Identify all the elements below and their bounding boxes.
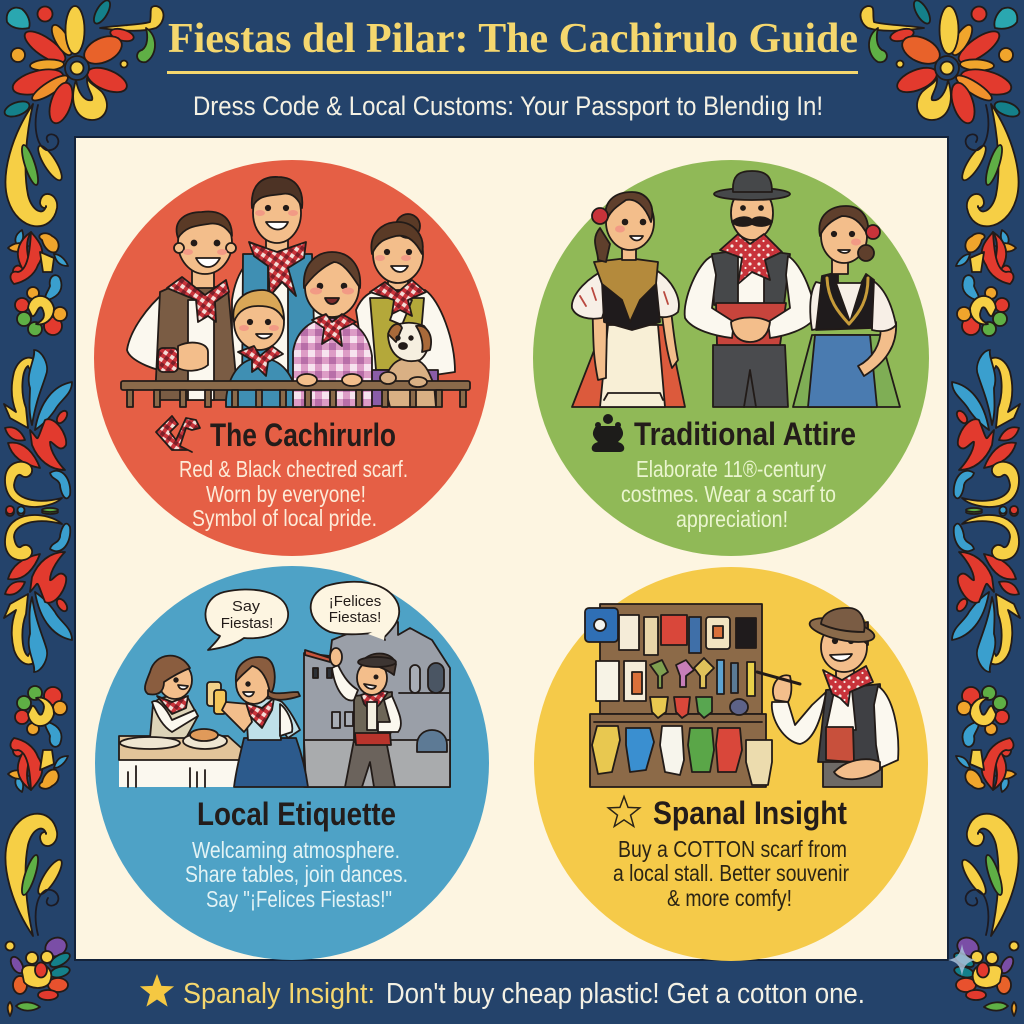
- right woman: [793, 206, 900, 407]
- boy: [226, 290, 297, 407]
- sparkle mark: [948, 944, 976, 976]
- heading: Spanal Insight: Spanal Insight: [653, 795, 847, 831]
- speech bubble: Felices Fiestas: [311, 582, 399, 640]
- panel: Local Etiquette: [95, 566, 489, 960]
- speech bubble: Felices Fiestas: ¡Felices: [329, 593, 381, 610]
- glasses: [207, 682, 226, 714]
- body text: insight: & more comfy!: [667, 885, 792, 911]
- body text: cachirulo: [179, 456, 408, 531]
- left woman: [572, 192, 685, 407]
- man waving: [330, 648, 401, 787]
- scarves: [592, 726, 772, 785]
- heading: Traditional Attire: Traditional Attire: [634, 416, 856, 452]
- body text: cachirulo: Worn by everyone!: [206, 481, 366, 507]
- title: Fiestas del Pilar: The Cachirulo Guide: [168, 16, 858, 62]
- panel: Traditional Attire: [533, 160, 929, 556]
- panel: The Cachirulo: [94, 160, 490, 556]
- railing: [121, 372, 470, 407]
- body text: attire: Elaborate 11®-century: [636, 456, 826, 482]
- buildings and street: [304, 622, 450, 787]
- hanging items row 2: [596, 658, 755, 718]
- seated woman: [120, 656, 227, 749]
- center man with hat: [685, 171, 815, 407]
- footer tip text: Don't buy cheap plastic! Get a cotton one.: [386, 978, 865, 1010]
- standing woman: [222, 657, 308, 787]
- illustration: traditional costumes: [572, 171, 900, 407]
- panel: Spanal Insight: [534, 567, 928, 961]
- illustration: scarf stall: [585, 604, 898, 787]
- body text: cachirulo: Red & Black chectred scarf.: [179, 456, 408, 482]
- speech bubble: Say Fiestas: Fiestas!: [221, 615, 273, 632]
- footer insight label: Spanaly Insight:: [183, 978, 375, 1010]
- left floral border: [3, 0, 163, 1016]
- body text: etiquette: [185, 837, 408, 912]
- left man in brown vest: [127, 212, 238, 400]
- illustration: family at railing: [121, 177, 470, 407]
- body text: attire: costmes. Wear a scarf to: [621, 481, 836, 507]
- back man in blue vest: [232, 177, 322, 400]
- title underline: [167, 71, 858, 74]
- stall board: [590, 604, 766, 787]
- right floral border: [860, 0, 1021, 1016]
- body text: etiquette: Welcaming atmosphere.: [192, 837, 400, 863]
- body text: insight: [613, 836, 849, 911]
- body text: insight: Buy a COTTON scarf from: [618, 836, 847, 862]
- girl in pink: [293, 252, 372, 407]
- heading: Local Etiquette: Local Etiquette: [197, 796, 396, 832]
- body text: etiquette: Say "¡Felices Fiestas!": [206, 886, 392, 912]
- icon: costume bear: [592, 414, 624, 452]
- body text: attire: [621, 456, 836, 532]
- main cream panel: [75, 137, 948, 960]
- dog: [384, 323, 436, 407]
- illustration: street scene: [119, 582, 450, 787]
- speech bubble: Say Fiestas: Say: [232, 598, 261, 615]
- footer star icon: [140, 974, 174, 1007]
- icon: checkered scarf: [156, 416, 200, 452]
- body text: attire: appreciation!: [676, 506, 788, 532]
- speech bubble: Say Fiestas: [205, 589, 288, 650]
- icon: outline star: [608, 796, 640, 826]
- table: [119, 736, 249, 787]
- heading: The Cachirurlo: The Cachirurlo: [210, 417, 396, 453]
- body text: cachirulo: Symbol of local pride.: [192, 505, 377, 531]
- hanging items row 1: [585, 608, 756, 655]
- speech bubble: Felices Fiestas: Fiestas!: [329, 609, 381, 626]
- subtitle: Dress Code & Local Customs: Your Passport to Blendiıg In!: [193, 91, 823, 121]
- man with pointer: [757, 608, 898, 787]
- right woman in olive vest: [356, 214, 455, 406]
- body text: insight: a local stall. Better souvenir: [613, 860, 849, 886]
- body text: etiquette: Share tables, join dances.: [185, 861, 408, 887]
